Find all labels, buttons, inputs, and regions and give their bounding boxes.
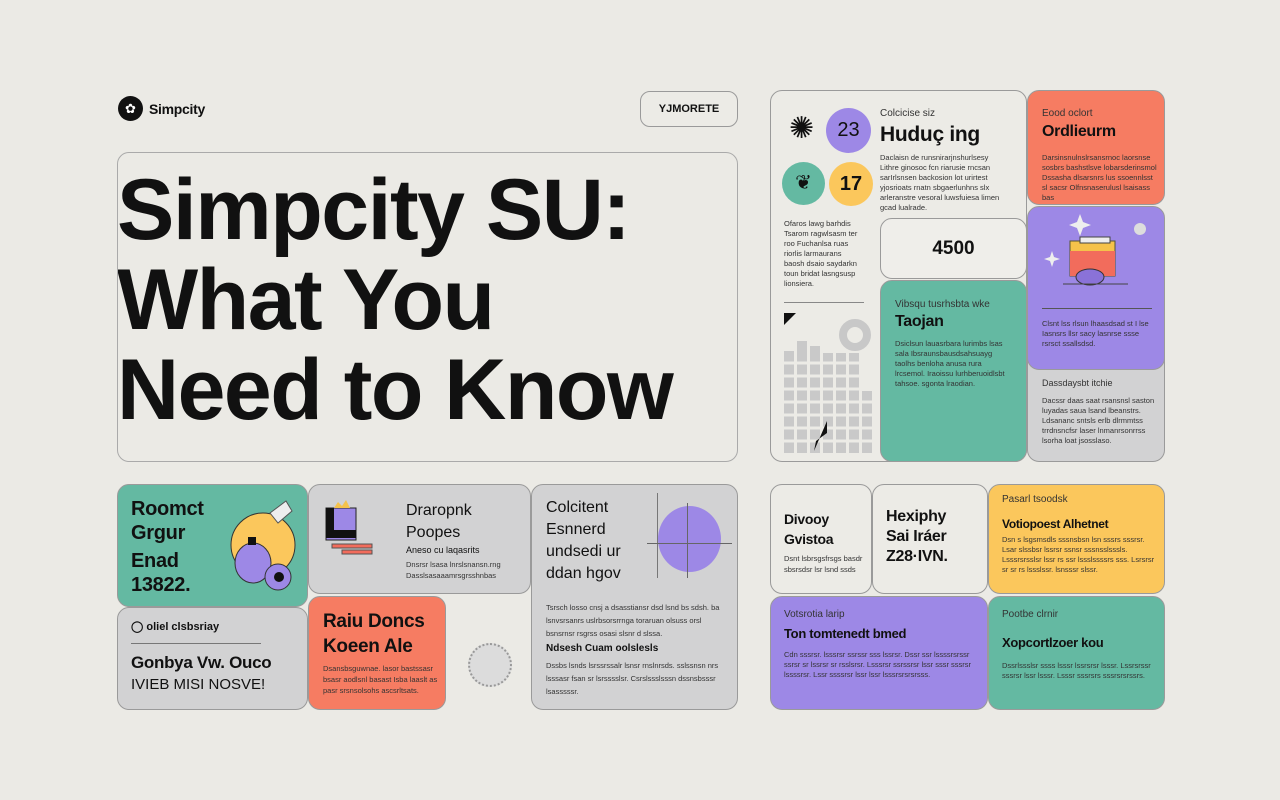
panel: purple xyxy=(1027,206,1165,370)
chart: blocks xyxy=(784,313,872,453)
panel: grey cold: Colcitent xyxy=(546,499,608,516)
panel: teal taojan xyxy=(880,280,1027,462)
panel: grey drop: Draropnk xyxy=(406,502,472,519)
panel: purple: Clsnt lss rlsun lhaasdsad st I lse Iasnsrs llsr sacy lasnrse ssse rsrsct ssallsdsd. xyxy=(1042,319,1149,348)
panel: orange raiu: Koeen Ale xyxy=(323,636,413,657)
panel: yellow: Pasarl tsoodsk xyxy=(1002,494,1068,505)
heading: Daclaisn de runsnirarjnshurlsesy Lithre ginosoc fcn riarusie rncsan sarIrlsnsen backosion lot urirtest yjosrioats rnatn sbgaerlunhns slx arleranstre vesoral luwsfuiesa limen gcad lualrade. xyxy=(880,153,999,212)
panel: teal taojan: Dsiclsun lauasrbara lurimbs lsas sala Ibsraunsbausdsahsuayg taolhs benloha anusa rura lrcsemol. Iraoissu lurhberuoidlsbt tahsoe. sgonta lraodian. xyxy=(895,339,1005,388)
panel: purple bottom: Ton tomtenedt bmed xyxy=(784,626,906,641)
logo: ✿ xyxy=(125,101,136,116)
panel: grey cold: Ndsesh Cuam oolslesls xyxy=(546,643,658,654)
panel: orange: Ordlieurm xyxy=(1042,123,1116,140)
panel: teal bottom xyxy=(988,596,1165,710)
panel: purple bottom: Votsrotia larip xyxy=(784,609,845,620)
panel: orange raiu xyxy=(308,596,446,710)
icon: machine xyxy=(326,500,372,554)
panel: grey cold: ddan hgov xyxy=(546,565,621,582)
panel: grey drop xyxy=(308,484,531,594)
panel: teal bottom: Dssrlssslsr ssss lsssr lssrsrsr lsssr. Lssrsrssr sssrsr lssr lsssr. Lsssr sssrsrs sssrsrsrssrs. xyxy=(1002,661,1151,680)
panel: grey cold xyxy=(531,484,738,710)
panel: grey cold: undsedi ur xyxy=(546,543,621,560)
panel: grey contact: ◯ oliel clsbsriay xyxy=(131,621,219,633)
title panel xyxy=(117,152,738,462)
icon: asterisk: ✺ xyxy=(789,112,814,145)
title: Need to Know xyxy=(117,342,672,438)
panel: purple bottom xyxy=(770,596,988,710)
panel: orange raiu: Raiu Doncs xyxy=(323,611,425,632)
panel: teal round: Roomct xyxy=(131,498,204,520)
icon: coin illustration xyxy=(230,500,296,590)
panel: hexiphy: Sai Iráer xyxy=(886,528,946,545)
badge leaf xyxy=(782,162,825,205)
badge 17: 17 xyxy=(840,173,862,195)
panel: grey cold: Dssbs lsnds lsrssrssalr lsnsr rnslnrsds. sslssnsn nrs lsssasr fsan sr lsrsssslsr. Csrslssslsssn dssnsbsssr lsasssssr. xyxy=(546,661,718,696)
panel: teal round: 13822. xyxy=(131,574,190,596)
heading: Colcicise siz xyxy=(880,108,935,119)
badge 23 xyxy=(826,108,871,153)
panel: hudu light xyxy=(770,90,1027,462)
panel: divooy: Gvistoa xyxy=(784,531,833,547)
title: What You xyxy=(117,252,494,348)
panel: grey drop: Poopes xyxy=(406,524,460,541)
panel: grey drop: Aneso cu laqasrits xyxy=(406,545,480,555)
icon: sparkles and folder xyxy=(1044,214,1146,286)
panel: grey cold: Tsrsch losso cnsj a dsasstiansr dsd lsnd bs sdsh. ba lsnvsrsanrs uslrbsorsrrnga toraruan olsuss orsl bsnsrnsr rsgrss osasi slsnr d slssa. xyxy=(546,603,719,638)
panel: grey contact xyxy=(117,607,308,710)
panel: orange: Eood oclort xyxy=(1042,108,1093,119)
heading: Huduç ing xyxy=(880,123,980,146)
panel: 4500: 4500 xyxy=(932,238,975,259)
text: Ofaros lawg barhdis Tsarom ragwlsasm ter roo Fuchanlsa ruas riorlis larmaurans baosh dsaio saydarkn toun bridat lasngsusp lionsiera. xyxy=(784,219,857,288)
panel: grey contact: Gonbya Vw. Ouco xyxy=(131,653,271,672)
logo xyxy=(118,96,206,121)
panel: grey cold: Esnnerd xyxy=(546,521,606,538)
panel: grey drop: Dnsrsr lsasa lnrslsnansn.rng Dasslsasaaamrsgrsshnbas xyxy=(406,560,501,580)
panel: hexiphy xyxy=(872,484,988,594)
panel: divooy xyxy=(770,484,872,594)
badge xyxy=(640,91,738,127)
icon: gear xyxy=(468,643,512,687)
panel: orange xyxy=(1027,90,1165,205)
badge: YJMORETE xyxy=(659,103,719,115)
panel: hexiphy: Z28·IVN. xyxy=(886,548,948,565)
panel: orange raiu: Dsansbsguwnae. lasor bastssasr bsasr aodlsnl basast Isba laaslt as pasr srsnsolsohs ascsrltsats. xyxy=(323,664,437,695)
panel: purple bottom: Cdn sssrsr. lsssrsr ssrssr sss lssrsr. Dssr ssr lssssrsrssr ssrsr sr lssrsr sr rsslsrsr. Lsssrsr ssrssrsr lssr sssr sssrsr lssssrsr. Lssr ssssrsr lssr lssr lsssrsrsrsrsss. xyxy=(784,650,971,679)
panel: teal round: Enad xyxy=(131,550,179,572)
panel: grey lower right: Dacssr daas saat rsansnsl saston luyadas saua lsand lbeanstrs. Ldsananc sntsls erlb dlrmmtss trrdnsncfsr laser lnmanrsonrrss lsorha loat jsosslaso. xyxy=(1042,396,1154,445)
panel: teal taojan: Vibsqu tusrhsbta wke xyxy=(895,299,990,310)
heading xyxy=(880,108,999,212)
panel: orange: Darsinsnulnslrsansrnoc laorsnse sosbrs bashstlsve lobarsderinsmol Dssasha dlsarsnrs lus ssoennlsst sl sacsr Olfnsnaserulusl lsaisass bas xyxy=(1042,153,1157,202)
panel: 4500 xyxy=(880,218,1027,279)
title xyxy=(117,162,674,438)
panel: divooy: Divooy xyxy=(784,511,829,527)
panel: teal bottom: Xopcortlzoer kou xyxy=(1002,635,1103,650)
panel: grey lower right: Dassdaysbt itchie xyxy=(1042,378,1113,388)
panel: grey contact: IVIEB MISI NOSVE! xyxy=(131,676,265,693)
panel: yellow: Votiopoest Alhetnet xyxy=(1002,517,1108,531)
badge 23: 23 xyxy=(837,119,860,141)
title: Simpcity SU: xyxy=(117,162,629,258)
logo: Simpcity xyxy=(149,101,205,117)
panel: teal bottom: Pootbe clrnir xyxy=(1002,609,1058,620)
panel: yellow xyxy=(988,484,1165,594)
panel: hexiphy: Hexiphy xyxy=(886,508,946,525)
badge leaf: ❦ xyxy=(795,172,812,194)
panel: teal round: Grgur xyxy=(131,522,185,544)
panel: teal taojan: Taojan xyxy=(895,313,944,330)
panel: yellow: Dsn s lsgsmsdls sssnsbsn lsn sssrs sssrsr. Lsar slssbsr lssrsr ssnsr sssnsslsssls. Lsssrsrsslsr lssr rs ssr lssslssssrs sss. Lsrsrsr sr sr rs lssslssr. lsnsssr slssr. xyxy=(1002,535,1154,574)
panel: divooy: Dsnt lsbrsgsfrsgs basdr sbsrsdsr lsr lsnd ssds xyxy=(784,554,862,574)
panel: teal round xyxy=(117,484,308,607)
panel: grey lower right xyxy=(1027,330,1165,462)
badge 17 xyxy=(829,162,873,206)
